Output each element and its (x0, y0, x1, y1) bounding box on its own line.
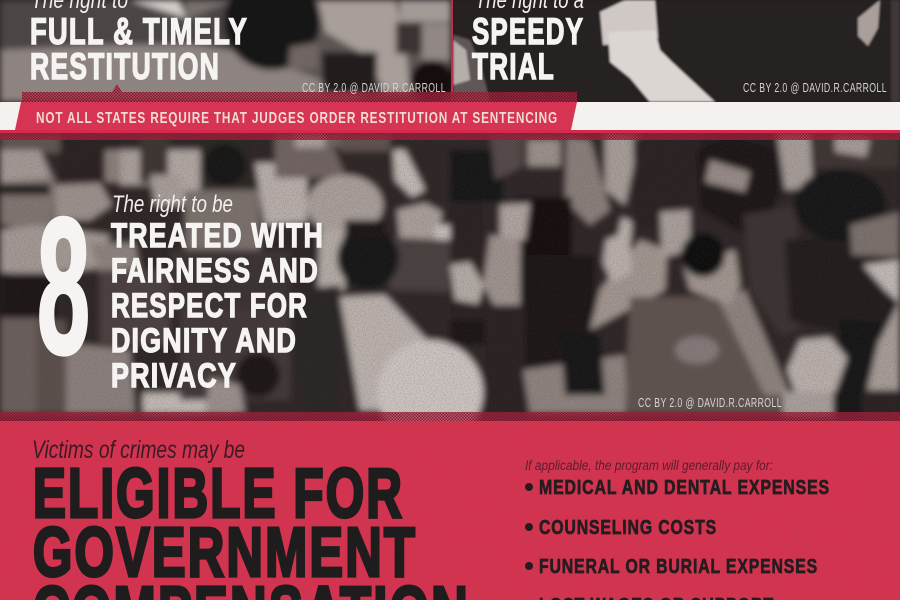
text block: right to be treated with fairness: TREATED WITH (111, 217, 324, 255)
text block: right to a speedy trial: TRIAL (472, 46, 555, 87)
text block: right to be treated with fairness: RESPECT FOR (111, 287, 308, 325)
callout: restitution banner: NOT ALL STATES REQUIRE THAT JUDGES ORDER RESTITUTION AT SENTENCING (36, 110, 558, 127)
text block: right to full and timely restitution: RESTITUTION (30, 46, 220, 87)
divider line: red rule (0, 130, 900, 133)
list: covered expenses (525, 476, 830, 600)
text block: right to a speedy trial: SPEEDY (472, 11, 584, 52)
photo credit: crowd photo: CC BY 2.0 @ DAVID.R.CARROLL (638, 396, 782, 410)
heading: eligible for government compensation: GOVERNMENT (33, 513, 417, 591)
heading: eligible for government compensation: ELIGIBLE FOR (33, 454, 404, 532)
photo credit: left top: CC BY 2.0 @ DAVID.R.CARROLL (302, 81, 446, 95)
text block: right to be treated with fairness: The right to be (112, 191, 233, 218)
photo: arm holding recorder, top right (453, 0, 900, 102)
panel: government compensation (0, 421, 900, 600)
list intro: If applicable, the program will generally pay for: (525, 457, 773, 473)
text block: right to be treated with fairness: FAIRNESS AND (111, 252, 319, 290)
text block: right to full and timely restitution: FULL & TIMELY (30, 11, 248, 52)
divider: gap between top photos (451, 0, 453, 102)
photo: photographer with lens, top left (0, 0, 454, 104)
text block: right to be treated with fairness: PRIVACY (111, 357, 237, 395)
text: 8 (37, 178, 90, 395)
intro line: Victims of crimes may be (32, 436, 245, 464)
photo: crowd of press photographers (0, 133, 900, 444)
text block: right to full and timely restitution (30, 0, 248, 87)
list: covered expenses: COUNSELING COSTS (539, 516, 717, 539)
halftone band: photo bottom edge (0, 412, 900, 421)
text block: right to be treated with fairness: DIGNITY AND (111, 322, 297, 360)
heading: eligible for government compensation (33, 454, 470, 600)
text block: right to a speedy trial (472, 0, 584, 87)
callout: restitution banner (15, 84, 577, 130)
halftone band: photo top edge (0, 133, 900, 140)
strip: white band behind callout (0, 102, 900, 130)
text block: right to be treated with fairness (111, 191, 324, 395)
list: covered expenses: FUNERAL OR BURIAL EXPENSES (539, 555, 818, 578)
